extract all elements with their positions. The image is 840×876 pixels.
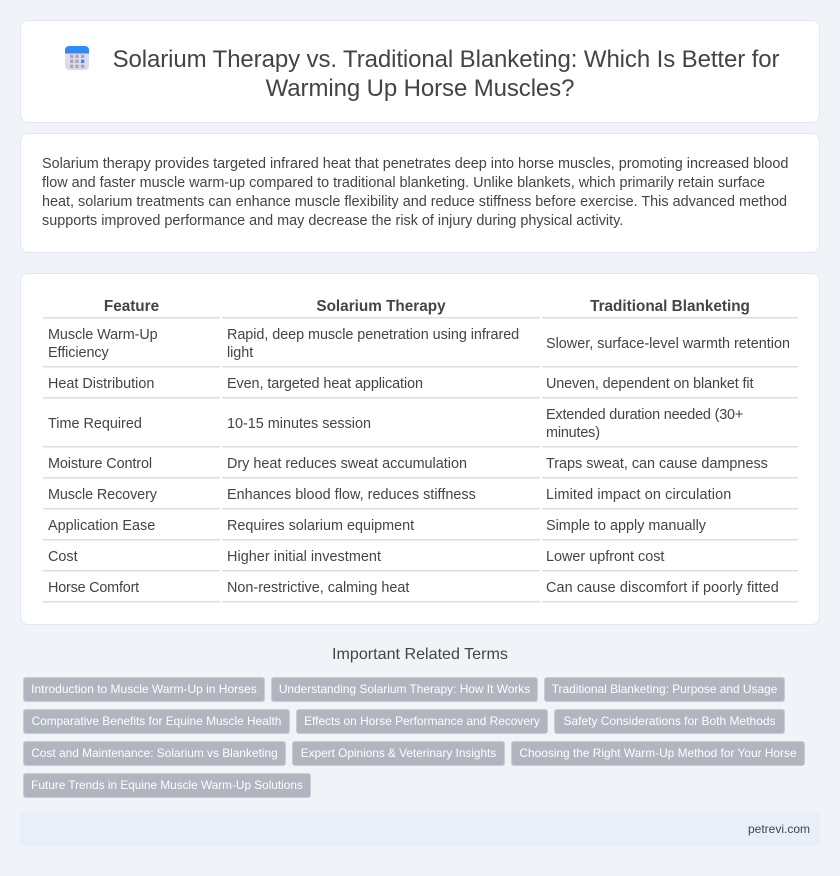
row: horse comfort: Can cause discomfort if poorly fitted xyxy=(546,580,779,596)
tag xyxy=(23,709,290,734)
tag xyxy=(296,709,548,734)
related terms tags xyxy=(23,677,805,798)
tag: Cost and Maintenance: Solarium vs Blanketing xyxy=(31,746,278,760)
tag: Effects on Horse Performance and Recovery xyxy=(304,714,540,728)
tag xyxy=(23,741,286,766)
row: time required: minutes) xyxy=(546,425,600,441)
row: time required: Time Required xyxy=(48,416,142,432)
row: time required: Extended duration needed (30+ xyxy=(546,407,743,423)
tag xyxy=(23,677,265,702)
icon: calendar xyxy=(65,46,89,70)
row: cost: Cost xyxy=(48,549,78,565)
tag: Understanding Solarium Therapy: How It Works xyxy=(279,682,530,696)
row: horse comfort: Horse Comfort xyxy=(48,580,139,596)
row: muscle warm-up efficiency: Muscle Warm-Up xyxy=(48,327,158,343)
row: application ease: Application Ease xyxy=(48,518,155,534)
row: muscle recovery: Muscle Recovery xyxy=(48,487,157,503)
row: muscle warm-up efficiency xyxy=(48,327,790,361)
heading: Solarium Therapy vs. Traditional Blanketing: Which Is Better for xyxy=(113,46,779,73)
table header: Feature xyxy=(104,298,159,315)
row: muscle warm-up efficiency: Rapid, deep muscle penetration using infrared xyxy=(227,327,519,343)
row: cost xyxy=(48,549,664,565)
row: heat distribution xyxy=(48,376,754,392)
tag: Safety Considerations for Both Methods xyxy=(563,714,776,728)
title panel xyxy=(20,20,820,123)
row: horse comfort: Non-restrictive, calming heat xyxy=(227,580,409,596)
row: application ease: Requires solarium equipment xyxy=(227,518,414,534)
tag: Expert Opinions & Veterinary Insights xyxy=(301,746,496,760)
row: moisture control: Moisture Control xyxy=(48,456,152,472)
tag xyxy=(23,773,311,798)
row: muscle warm-up efficiency: Efficiency xyxy=(48,345,109,361)
table header: Traditional Blanketing xyxy=(590,298,750,315)
tag: Traditional Blanketing: Purpose and Usage xyxy=(552,682,777,696)
row: heat distribution: Uneven, dependent on blanket fit xyxy=(546,376,753,392)
intro text: supports improved performance and may decrease the risk of injury during physical activity. xyxy=(42,213,623,229)
row: moisture control: Traps sweat, can cause dampness xyxy=(546,456,768,472)
table header xyxy=(104,298,750,315)
tag: Choosing the Right Warm-Up Method for Your Horse xyxy=(519,746,797,760)
row: moisture control xyxy=(48,456,768,472)
row: muscle recovery xyxy=(48,487,731,503)
footer source: petrevi.com xyxy=(748,822,810,836)
row: heat distribution: Heat Distribution xyxy=(48,376,154,392)
heading: Warming Up Horse Muscles? xyxy=(266,75,574,102)
table header: Solarium Therapy xyxy=(316,298,446,315)
row: time required: 10-15 minutes session xyxy=(227,416,371,432)
row: time required xyxy=(48,407,743,441)
tag: Comparative Benefits for Equine Muscle Health xyxy=(32,714,281,728)
row: muscle warm-up efficiency: light xyxy=(227,345,253,361)
row: muscle recovery: Limited impact on circulation xyxy=(546,487,731,503)
tag xyxy=(511,741,805,766)
row: application ease: Simple to apply manually xyxy=(546,518,706,534)
footer xyxy=(20,812,820,846)
row: cost: Higher initial investment xyxy=(227,549,381,565)
row: muscle recovery: Enhances blood flow, reduces stiffness xyxy=(227,487,476,503)
row: muscle warm-up efficiency: Slower, surface-level warmth retention xyxy=(546,336,790,352)
tag: Future Trends in Equine Muscle Warm-Up Solutions xyxy=(31,778,303,792)
tag xyxy=(271,677,538,702)
comparison table panel xyxy=(20,273,820,625)
tag: Introduction to Muscle Warm-Up in Horses xyxy=(31,682,257,696)
intro text: Solarium therapy provides targeted infrared heat that penetrates deep into horse muscles, promoting increased blood xyxy=(42,156,788,172)
intro text xyxy=(42,156,788,229)
row: horse comfort xyxy=(48,580,779,596)
intro text: heat, solarium treatments can enhance muscle flexibility and reduce stiffness before exercise. This advanced method xyxy=(42,194,787,210)
row: application ease xyxy=(48,518,706,534)
tag xyxy=(292,741,505,766)
tag xyxy=(544,677,785,702)
heading xyxy=(113,46,780,102)
row: moisture control: Dry heat reduces sweat accumulation xyxy=(227,456,467,472)
related terms heading: Important Related Terms xyxy=(332,645,508,663)
intro panel xyxy=(20,133,820,253)
tag xyxy=(554,709,785,734)
row: heat distribution: Even, targeted heat application xyxy=(227,376,423,392)
intro text: flow and faster muscle warm-up compared to traditional blanketing. Unlike blankets, which primarily retain surface xyxy=(42,175,765,191)
row: cost: Lower upfront cost xyxy=(546,549,664,565)
